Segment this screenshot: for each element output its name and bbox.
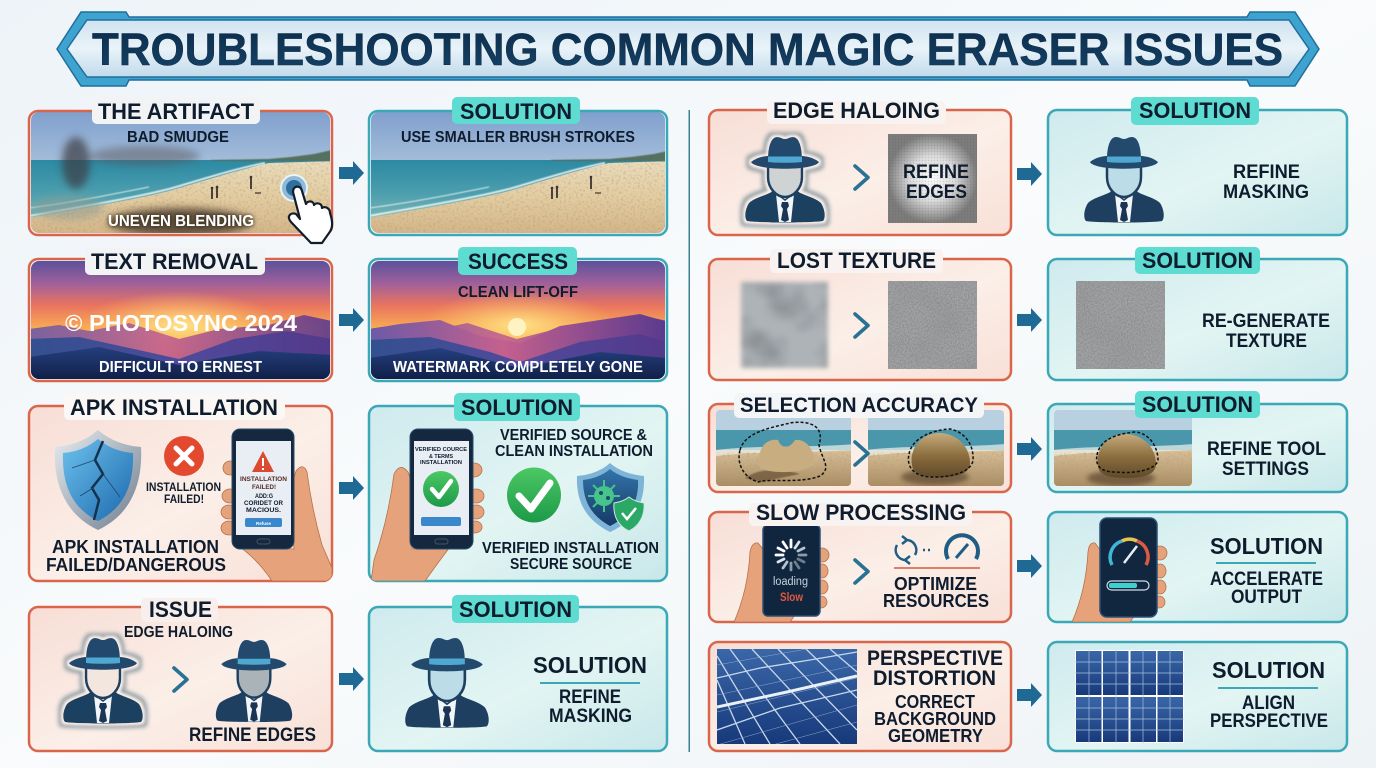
arrow: [339, 308, 364, 332]
chevron: [174, 668, 187, 691]
panel: verified solution: [369, 393, 667, 581]
text block: GEOMETRY: [888, 726, 983, 746]
arrow: [339, 476, 364, 500]
text block: MASKING: [549, 706, 632, 727]
icon: figure: [1084, 137, 1164, 222]
panel: solution tool settings: [1048, 391, 1347, 492]
caption: EDGE HALOING: [124, 624, 233, 641]
arrow: [1017, 308, 1042, 332]
text block: OUTPUT: [1231, 587, 1302, 608]
text block: [1210, 533, 1323, 608]
panel: solution accelerate: [1048, 512, 1347, 622]
caption: TEXTURE: [1226, 331, 1307, 352]
photo: solar panels skewed: [717, 649, 857, 744]
texture swatch: [1076, 281, 1165, 369]
caption: BAD SMUDGE: [127, 129, 229, 146]
caption: RE-GENERATE: [1202, 311, 1330, 332]
text block: PERSPECTIVE: [1210, 711, 1328, 732]
panel: edge haloing: [709, 98, 1011, 235]
caption: [1202, 311, 1330, 352]
panel: success: [369, 247, 667, 381]
panel: solution masking: [1048, 97, 1347, 235]
chevron: [855, 560, 868, 583]
icon: hand holding verified phone: INSTALLATION: [420, 460, 462, 466]
arrow: [1017, 162, 1042, 186]
icon: pointer hand: [281, 175, 332, 243]
icon: secure shield: [577, 463, 644, 532]
photo: refined selection: [1053, 410, 1193, 486]
chevron: [855, 166, 868, 189]
heading: TEXT REMOVAL: [91, 249, 258, 274]
panel: perspective distortion: [709, 640, 1011, 760]
caption: REFINE EDGES: [189, 725, 316, 746]
heading: SOLUTION: [461, 395, 573, 420]
text block: REFINE: [559, 687, 621, 708]
icon: figure: [405, 638, 489, 728]
text block: [867, 647, 1003, 746]
title: TROUBLESHOOTING COMMON MAGIC ERASER ISSUES: [92, 24, 1283, 75]
caption: SECURE SOURCE: [510, 556, 632, 573]
caption: REFINE: [1233, 162, 1300, 183]
icon: haloed figure: [745, 137, 825, 222]
caption: RESOURCES: [883, 590, 989, 611]
watermark: © PHOTOSYNC 2024: [65, 310, 297, 336]
icon: hand holding warning phone: MACIOUS.: [246, 508, 281, 514]
text block: SOLUTION: [533, 652, 647, 678]
heading: SLOW PROCESSING: [756, 500, 966, 525]
arrow: [1017, 554, 1042, 578]
panel: the artifact: [29, 97, 332, 243]
heading: ISSUE: [149, 597, 212, 622]
photo: loose selection: [716, 410, 856, 486]
icon: hand holding warning phone: INSTALLATION: [240, 476, 287, 483]
smudge: [32, 137, 252, 236]
text block: BACKGROUND: [874, 709, 996, 729]
caption: [495, 427, 653, 460]
refine edges swatch: EDGES: [906, 182, 967, 203]
divider: [894, 567, 980, 569]
text block: PERSPECTIVE: [867, 647, 1003, 670]
heading: SUCCESS: [468, 249, 568, 274]
arrow: [1017, 437, 1042, 461]
refine edges swatch: [888, 134, 977, 223]
caption: FAILED/DANGEROUS: [46, 555, 226, 575]
text block: SOLUTION: [1212, 657, 1325, 683]
panel: selection accuracy: [709, 393, 1011, 492]
heading: SOLUTION: [1142, 392, 1253, 417]
caption: USE SMALLER BRUSH STROKES: [401, 129, 635, 146]
caption: APK INSTALLATION: [52, 537, 219, 557]
photo: tight selection: [866, 410, 1006, 486]
text block: [533, 652, 647, 727]
chevron: [855, 442, 868, 465]
text block: DISTORTION: [873, 667, 996, 690]
caption: [883, 573, 989, 611]
caption: INSTALLATION: [146, 480, 221, 494]
caption: UNEVEN BLENDING: [108, 213, 254, 230]
text block: ACCELERATE: [1210, 569, 1323, 590]
icon: hand holding warning phone: ADD:G: [255, 494, 273, 500]
icon: hand holding verified phone: [371, 429, 484, 581]
caption: CLEAN INSTALLATION: [495, 443, 653, 460]
icon: hand holding warning phone: Refuse: [256, 521, 272, 526]
caption: VERIFIED INSTALLATION: [482, 540, 659, 557]
caption: FAILED!: [164, 492, 204, 506]
icon: optimize cycle and gauge: [896, 535, 978, 564]
icon: haloed figure: [63, 638, 143, 724]
panel: issue edge haloing: [29, 597, 332, 751]
heading: SELECTION ACCURACY: [740, 394, 978, 417]
icon: hand holding warning phone: FAILED!: [252, 484, 276, 491]
arrow: [339, 161, 364, 185]
caption: VERIFIED SOURCE &: [500, 427, 647, 444]
icon: phone loading: loading: [773, 576, 808, 588]
icon: hand holding warning phone: [221, 429, 332, 581]
caption: CLEAN LIFT-OFF: [458, 284, 578, 301]
panel: solution regenerate: [1048, 247, 1347, 380]
icon: hand holding verified phone: VERIFIED COURCE: [415, 447, 467, 453]
caption: [46, 537, 226, 575]
caption: MASKING: [1223, 182, 1309, 203]
caption: [1223, 162, 1309, 203]
title banner: [57, 12, 1319, 86]
panel: solution align: [1048, 642, 1347, 751]
panel: solution brush strokes: [369, 97, 672, 236]
heading: SOLUTION: [1142, 248, 1253, 273]
icon: cracked shield: [55, 430, 141, 530]
icon: phone loading: [734, 525, 829, 622]
caption: SETTINGS: [1222, 459, 1309, 480]
text block: CORRECT: [895, 692, 975, 712]
panel: slow processing: [709, 500, 1011, 622]
caption: REFINE TOOL: [1207, 439, 1326, 460]
restored texture swatch: [888, 281, 977, 369]
caption: [482, 540, 659, 573]
panel: lost texture: [709, 248, 1011, 380]
text block: SOLUTION: [1210, 533, 1323, 559]
caption: WATERMARK COMPLETELY GONE: [393, 359, 643, 376]
icon: green check: [507, 468, 561, 522]
icon: failure x: [164, 436, 204, 476]
icon: phone with gauge: [1072, 518, 1167, 622]
heading: SOLUTION: [1139, 98, 1251, 123]
panel: text removal: [29, 248, 332, 381]
icon: phone loading: Slow: [780, 592, 803, 604]
icon: refined figure: [216, 640, 292, 722]
heading: SOLUTION: [459, 597, 572, 622]
text block: ALIGN: [1242, 693, 1295, 714]
arrow: [1017, 683, 1042, 707]
panel: apk installation: [29, 394, 332, 581]
icon: hand holding warning phone: CORIDET OR: [244, 501, 284, 507]
caption: OPTIMIZE: [894, 573, 977, 594]
chevron: [855, 314, 868, 337]
panel: solution refine masking: [369, 595, 667, 751]
caption: DIFFICULT TO ERNEST: [99, 359, 262, 376]
icon: hand holding verified phone: & TERMS: [429, 454, 453, 460]
heading: LOST TEXTURE: [777, 248, 936, 273]
arrow: [339, 667, 364, 691]
heading: SOLUTION: [460, 99, 572, 124]
refine edges swatch: REFINE: [903, 162, 969, 183]
blurred texture swatch: [741, 282, 828, 368]
heading: THE ARTIFACT: [98, 99, 255, 124]
icon: aligned solar panels: [1075, 650, 1184, 743]
heading: EDGE HALOING: [773, 98, 940, 123]
heading: APK INSTALLATION: [70, 395, 278, 420]
text block: [1210, 657, 1328, 732]
caption: [1207, 439, 1326, 480]
caption: [146, 480, 221, 506]
